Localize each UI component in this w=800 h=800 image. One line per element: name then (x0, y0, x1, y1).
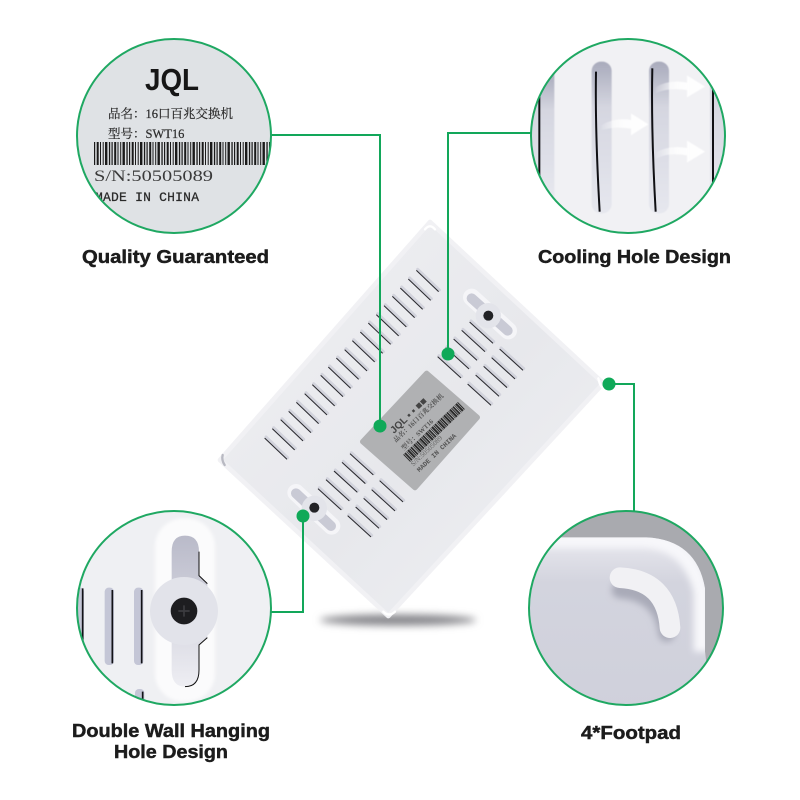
sticker model: 型号：SWT16 (399, 416, 436, 452)
sticker brand: JQL ▪ ▪ ■■ (388, 396, 430, 436)
sticker origin: MADE IN CHINA (415, 432, 458, 474)
screw (171, 598, 197, 624)
connector: quality (271, 135, 386, 432)
heading: Double Wall Hanging Hole Design: Hole Design (114, 742, 228, 762)
label background (78, 40, 270, 232)
product name: 品名：16口百兆交换机 (108, 106, 234, 121)
background behind device (561, 512, 722, 661)
raised bevel (155, 518, 215, 702)
sticker product name: 品名：16口百兆交换机 (391, 391, 446, 444)
product label sticker (363, 373, 477, 488)
heading: Cooling Hole Design: Cooling Hole Design (538, 247, 731, 267)
footpad hook (620, 578, 670, 628)
sticker serial: S/N:50505089 (409, 434, 444, 468)
heading: Double Wall Hanging Hole Design (72, 721, 270, 762)
panel: wall hanging hole circle (76, 510, 272, 706)
device corner (530, 537, 706, 704)
panel: cooling hole circle (530, 38, 726, 234)
keyhole slot (172, 536, 207, 687)
device: switch underside (220, 222, 603, 616)
brand JQL: JQL (145, 62, 199, 97)
connector: cooling (442, 133, 531, 360)
callout lines and markers (271, 133, 634, 612)
hook shadow (620, 590, 667, 633)
surface background (80, 512, 270, 704)
side vents (78, 588, 144, 700)
barcode (94, 142, 272, 165)
keyhole bottom left (296, 493, 332, 526)
heading: Quality Guaranteed: Quality Guaranteed (82, 247, 269, 267)
surface background (554, 40, 710, 232)
heading: 4*Footpad: 4*Footpad (581, 723, 681, 743)
corner footpads (222, 226, 603, 614)
model: 型号：SWT16 (108, 126, 184, 141)
device body (220, 222, 603, 616)
ventilation slots (265, 269, 524, 537)
airflow arrows (602, 75, 705, 163)
heading: Double Wall Hanging Hole Design: Double Wall Hanging (72, 721, 270, 741)
device shadow (320, 614, 476, 626)
vent slots (532, 61, 724, 213)
connector: wall hanging (271, 510, 310, 612)
keyhole top right (472, 297, 508, 331)
sticker barcode (407, 405, 462, 458)
made in china: MADE IN CHINA (95, 190, 199, 205)
panel: quality guaranteed circle (76, 38, 272, 234)
connector: footpad (602, 378, 634, 512)
slot shadow lines (539, 68, 713, 212)
keyhole disc (150, 577, 218, 645)
serial number: S/N:50505089 (94, 168, 213, 185)
panel: footpad circle (528, 510, 724, 706)
